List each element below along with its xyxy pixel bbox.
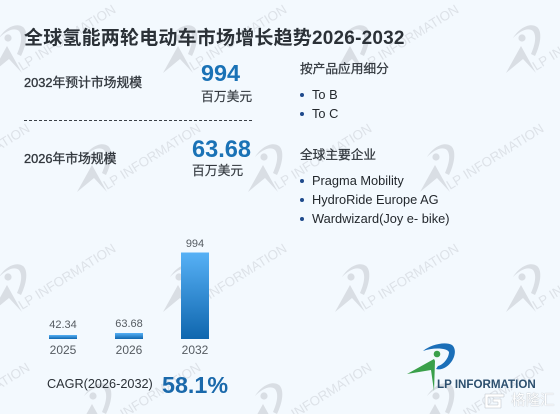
logo arrow: [407, 359, 435, 391]
watermark pattern: LP INFORMATION: [444, 121, 546, 193]
bar 2032: 2032: [182, 343, 209, 357]
list item: HydroRide Europe AG: [312, 192, 439, 207]
bar 2025: [49, 319, 77, 357]
list item: Wardwizard(Joy e- bike): [312, 211, 449, 226]
brand name: 格隆汇: [511, 389, 554, 410]
list item: Pragma Mobility: [312, 173, 404, 188]
logo arc: [423, 343, 455, 369]
CAGR value: 58.1%: [162, 372, 228, 398]
watermark pattern: LP INFORMATION: [359, 2, 461, 74]
bar 2025: 2025: [50, 343, 77, 357]
logo wordmark: LP INFORMATION: [437, 378, 536, 391]
bar 2032: [181, 238, 209, 357]
unit: 百万美元: [192, 163, 243, 178]
panel: 2026 market size: [24, 137, 251, 178]
panel: 2032 market size: [24, 60, 252, 104]
watermark pattern: LP INFORMATION: [16, 241, 118, 313]
watermark pattern: LP INFORMATION: [187, 241, 289, 313]
logo dot: [434, 351, 440, 357]
list item: To C: [312, 106, 338, 121]
heading: 按产品应用细分: [300, 62, 389, 76]
bar 2032: 994: [186, 238, 204, 250]
panel: key companies: [300, 148, 449, 226]
watermark pattern: LP INFORMATION: [101, 121, 203, 193]
divider: [24, 120, 252, 121]
watermark pattern: LP INFORMATION: [16, 2, 118, 74]
panel: product segments: [300, 62, 389, 121]
bar 2025: 42.34: [49, 319, 77, 331]
CAGR callout: [47, 372, 228, 398]
value: 994: 994: [201, 60, 240, 86]
bar 2026: [115, 318, 143, 357]
bar chart: [49, 238, 209, 357]
label: 2032 forecast: 2032年预计市场规模: [24, 75, 142, 90]
heading: 全球主要企业: [300, 148, 376, 162]
title: 全球氢能两轮电动车市场增长趋势2026-2032: [24, 28, 405, 49]
watermark pattern: LP INFORMATION: [272, 121, 374, 193]
watermark pattern: LP INFORMATION: [359, 241, 461, 313]
source watermark: [484, 389, 554, 410]
G mark: [484, 394, 504, 408]
unit: 百万美元: [201, 89, 252, 104]
list item: To B: [312, 87, 338, 102]
watermark pattern: LP INFORMATION: [187, 2, 289, 74]
label: 2026 size: 2026年市场规模: [24, 151, 116, 166]
value: 63.68: 63.68: [192, 137, 251, 163]
bar 2026: 63.68: [115, 318, 143, 330]
bar 2026: 2026: [116, 343, 143, 357]
logo: LP Information: [407, 343, 536, 391]
CAGR label: CAGR(2026-2032): [47, 377, 153, 391]
